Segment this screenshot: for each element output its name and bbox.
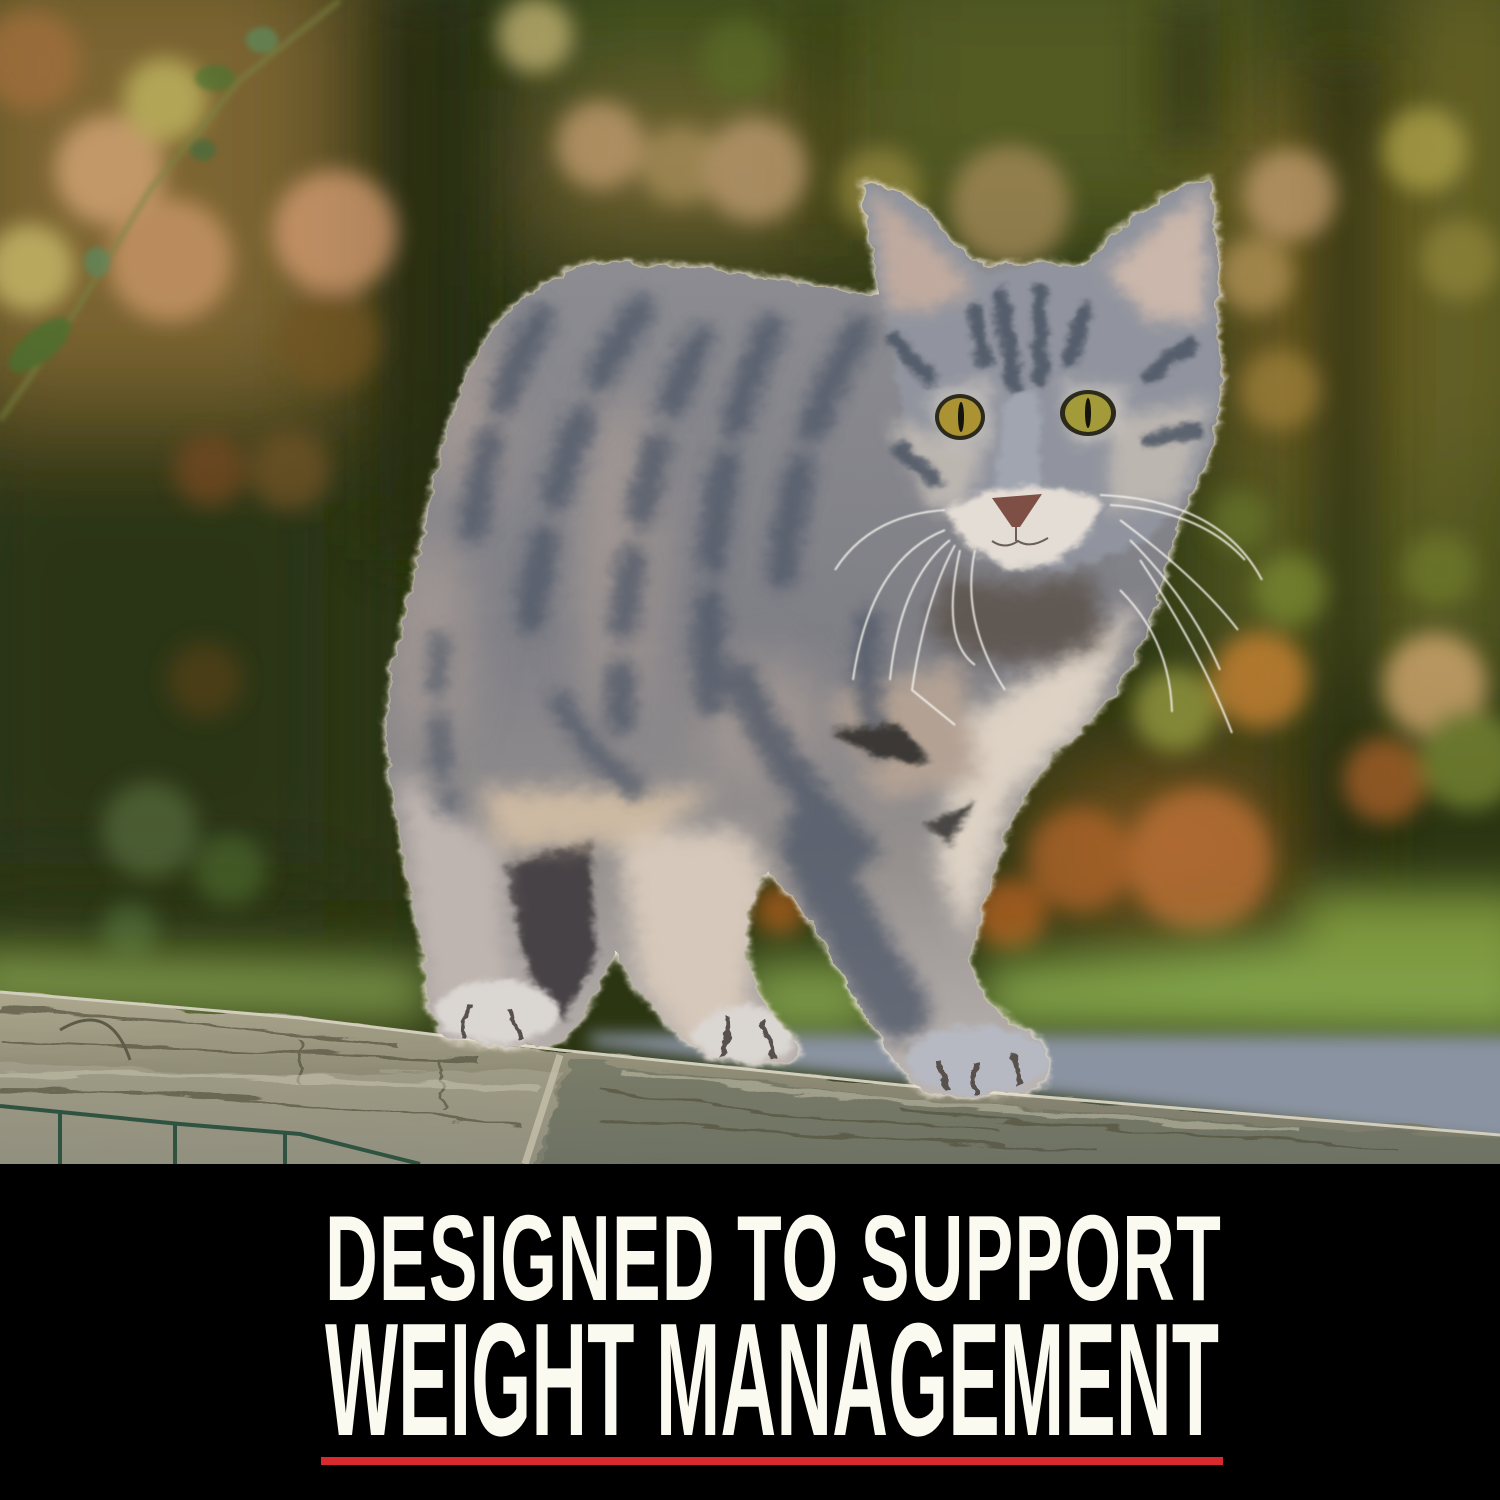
fence rail: [0, 992, 1500, 1180]
cat: pale belly and legs: [395, 600, 1140, 1060]
cat: nose and mouth: [992, 494, 1048, 546]
cat: tabby stripes: [437, 310, 900, 1010]
cat: far hind leg shadow: [505, 840, 596, 1020]
foreground leaves and branch: [0, 0, 340, 420]
dark tree trunks: [380, 0, 1380, 900]
grass strip: [0, 890, 1500, 1040]
cat: [380, 170, 1262, 1100]
cat: whiskers: [835, 495, 1262, 733]
red underline: [321, 1457, 1223, 1465]
cat: warm fur patches: [390, 330, 820, 780]
black caption band: [0, 1164, 1500, 1500]
cat: paws: [435, 980, 1050, 1094]
cat: eyes: [935, 390, 1116, 440]
cat: head: [860, 180, 1220, 663]
heading line 1: DESIGNED TO SUPPORT: [325, 1191, 1221, 1327]
cat: rim light: [388, 178, 1220, 1096]
road: [590, 1034, 1500, 1150]
photo: blurred garden background: [0, 0, 1500, 1180]
